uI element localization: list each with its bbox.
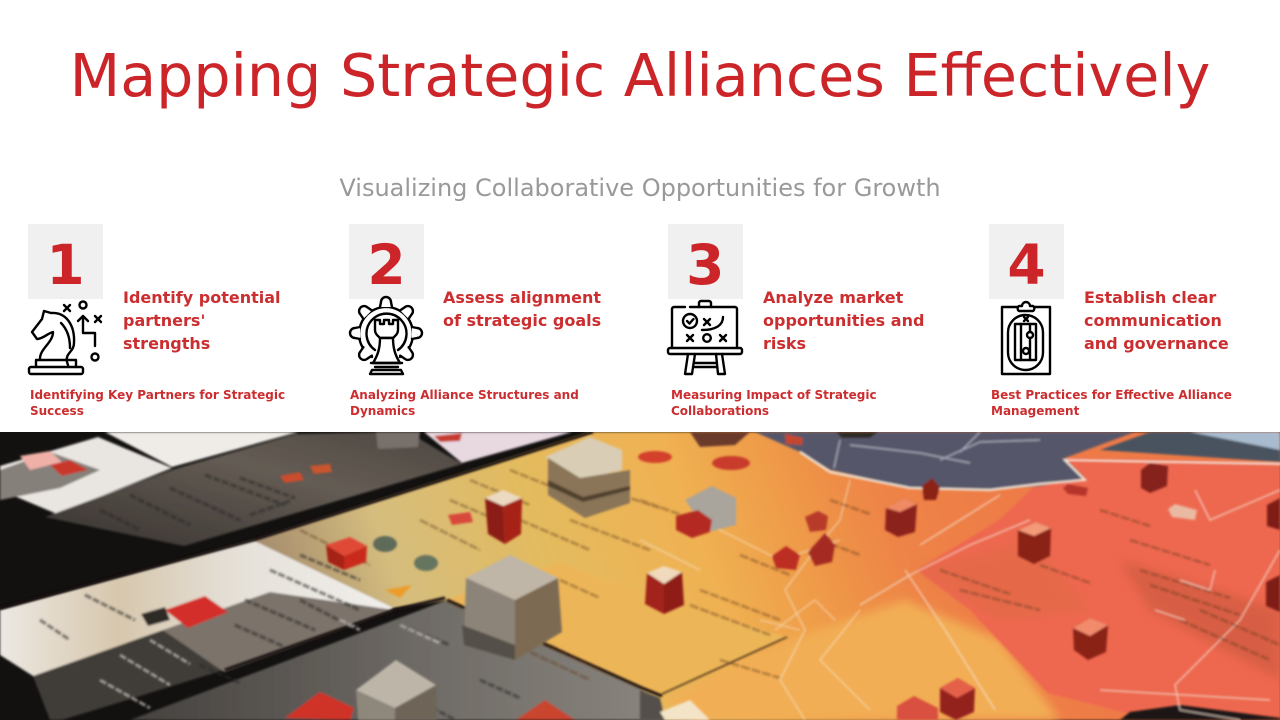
step 4 heading [1084, 288, 1229, 353]
step 3 description: Collaborations [671, 404, 769, 418]
sheet edges [225, 598, 662, 696]
step 2 description: Analyzing Alliance Structures and [350, 388, 579, 402]
step 2 description: Dynamics [350, 404, 415, 418]
step 4 description [991, 388, 1232, 418]
step 2 heading: Assess alignment [443, 288, 601, 307]
step 4 number: 4 [1007, 233, 1046, 297]
neutral blocks [545, 437, 622, 480]
step 4 heading: and governance [1084, 334, 1229, 353]
step 3 heading: Analyze market [763, 288, 903, 307]
red pieces [326, 537, 367, 556]
step 3 heading: risks [763, 334, 806, 353]
step 3 heading: opportunities and [763, 311, 924, 330]
step 2 heading [443, 288, 601, 330]
sheets, left side [0, 437, 172, 514]
step 2 description [350, 388, 579, 418]
icon: clipboard with playing field [1000, 300, 1052, 376]
blurred map text [300, 470, 1280, 680]
step 1 number: 1 [46, 233, 85, 297]
step 1 description: Success [30, 404, 84, 418]
step 4 heading: communication [1084, 311, 1222, 330]
step 3 description: Measuring Impact of Strategic [671, 388, 877, 402]
step 1 heading [123, 288, 280, 353]
step 3 number: 3 [686, 233, 724, 297]
icon: chess knight with strategy arrow [28, 300, 102, 376]
title: Mapping Strategic Alliances Effectively [70, 42, 1210, 110]
step 1 number [28, 224, 103, 299]
step 1 description [30, 388, 285, 418]
icon: gear with chess rook [348, 296, 424, 376]
step 1 heading: partners' [123, 311, 205, 330]
slate region, upper right [755, 432, 1135, 490]
step 4 heading: Establish clear [1084, 288, 1216, 307]
step 2 heading: of strategic goals [443, 311, 601, 330]
step 3 number [668, 224, 743, 299]
step 1 heading: strengths [123, 334, 210, 353]
map sheets [253, 432, 1280, 720]
step 2 number: 2 [367, 233, 406, 297]
roads [860, 490, 1280, 720]
step 1 heading: Identify potential [123, 288, 280, 307]
step 3 heading [763, 288, 924, 353]
photo: strategic map board with game pieces [0, 432, 1280, 720]
step 3 description [671, 388, 877, 418]
step 1 description: Identifying Key Partners for Strategic [30, 388, 285, 402]
subtitle: Visualizing Collaborative Opportunities for Growth [339, 174, 941, 202]
map dots [638, 451, 672, 463]
step 4 description: Management [991, 404, 1079, 418]
step 2 number [349, 224, 424, 299]
step 4 number [989, 224, 1064, 299]
step 4 description: Best Practices for Effective Alliance [991, 388, 1232, 402]
icon: tactic board on easel [666, 300, 744, 376]
